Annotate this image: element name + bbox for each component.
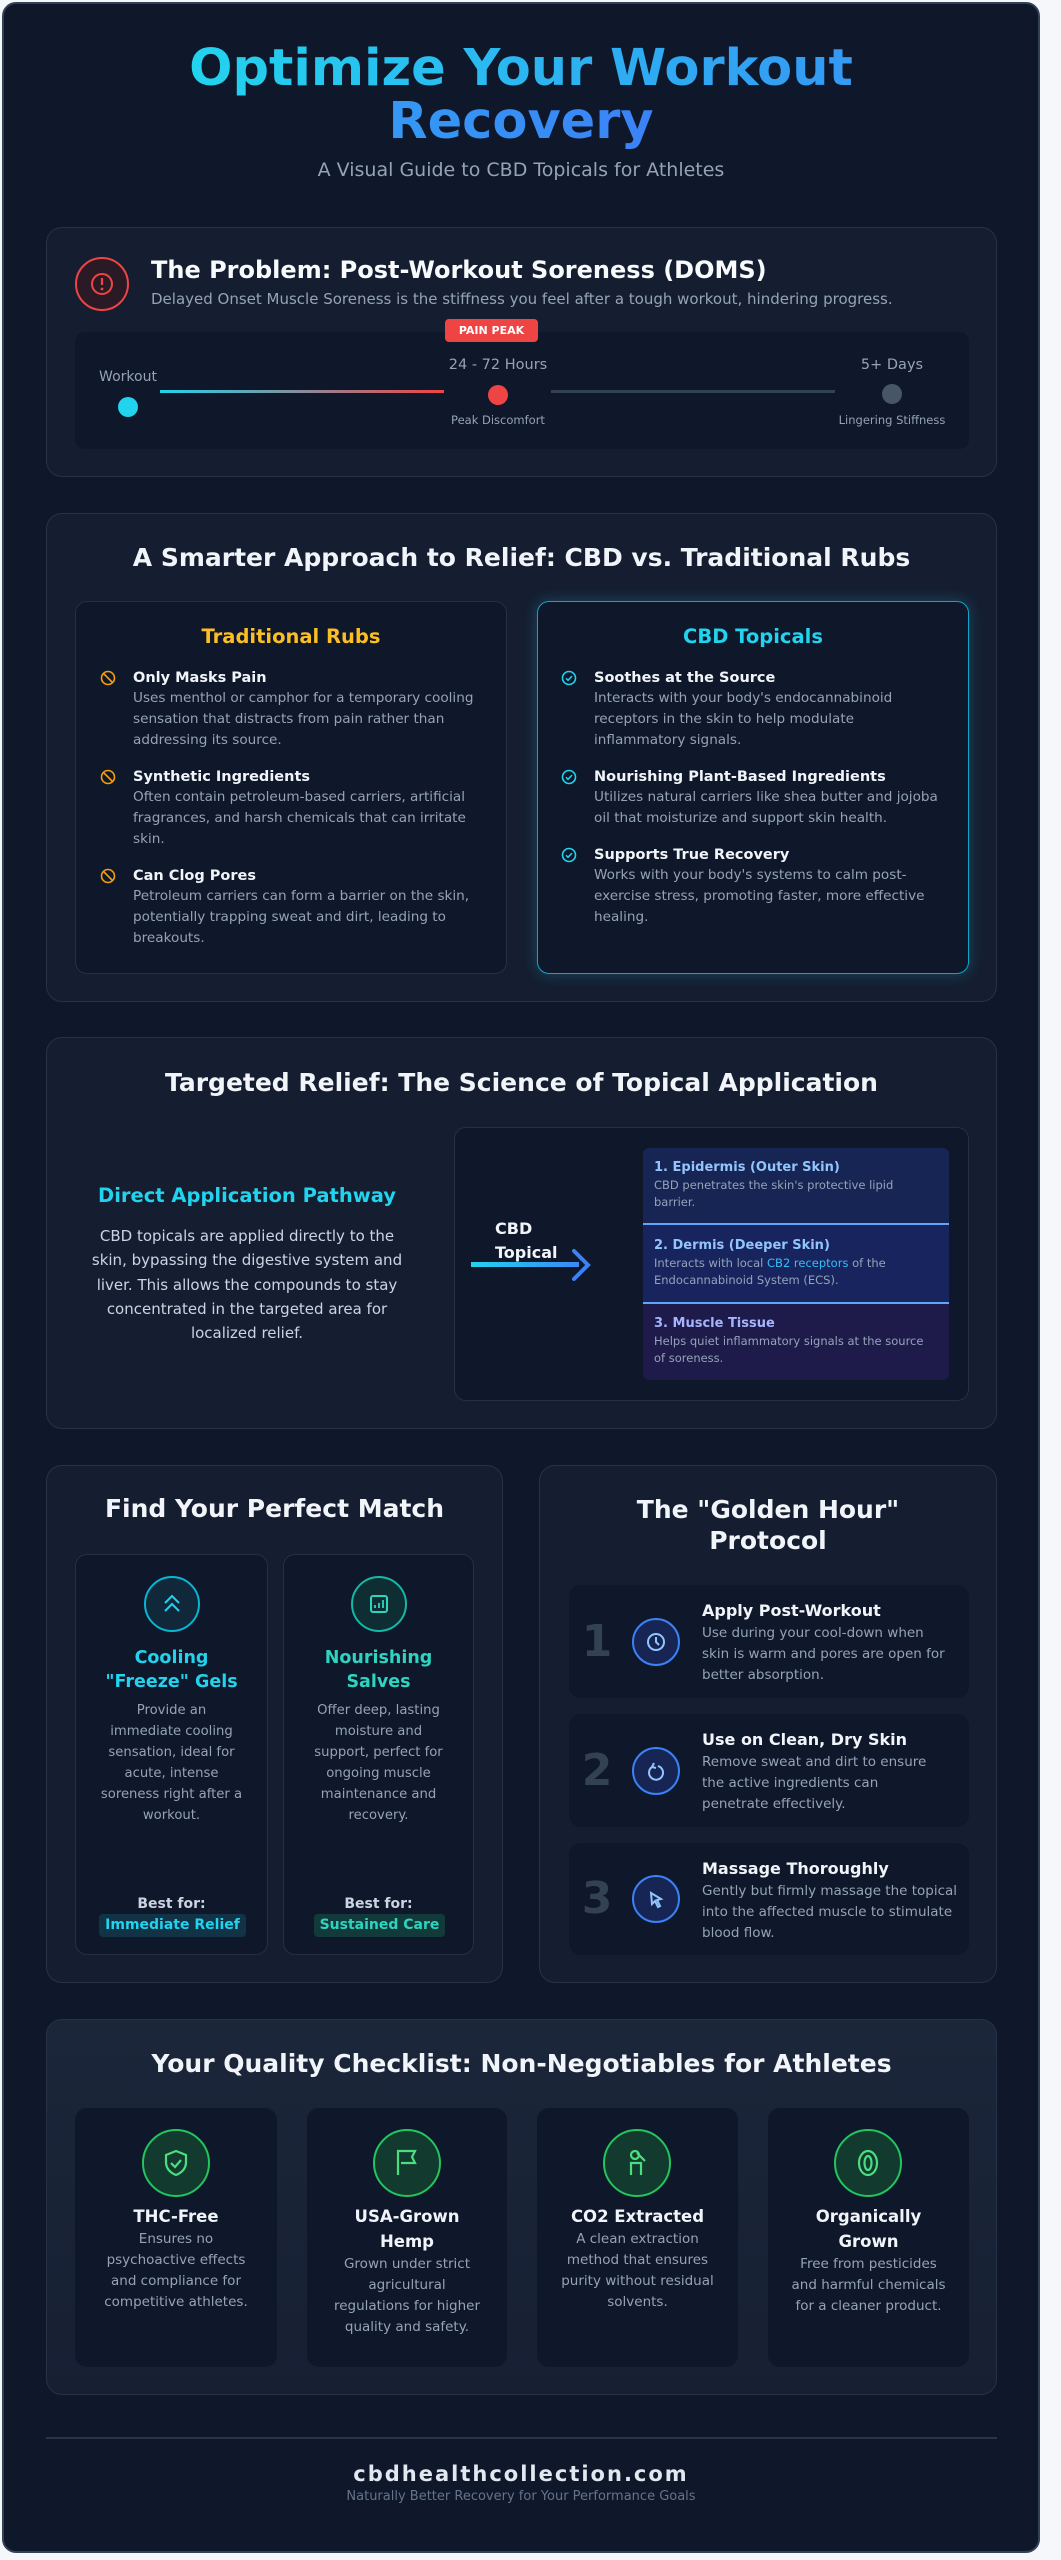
item: organically grown: Organically [816,2207,921,2226]
arrow [471,1248,591,1282]
item: only masks pain [100,670,473,748]
badge: immediate relief [99,1914,246,1937]
card: traditional rubs [75,601,507,974]
heading [636,1495,899,1555]
item: synthetic ingredients: Synthetic Ingredients [133,769,310,785]
label: CBD topical: Topical [495,1243,557,1262]
item: THC-free: THC-Free [133,2207,219,2226]
badge: sustained care: Sustained Care [320,1917,439,1933]
label: lingering stiffness: Lingering Stiffness [839,413,945,427]
item: organically grown [768,2108,969,2367]
badge: sustained care [314,1914,445,1937]
layer: epidermis [643,1148,949,1224]
item: THC-free: and compliance for [111,2273,241,2289]
card title: Traditional Rubs [202,625,380,648]
description: Offer deep, lasting [317,1703,440,1718]
card title: CBD Topicals [683,625,823,648]
gray line [551,390,835,393]
item: organically grown: Grown [838,2232,898,2251]
item: USA-grown hemp: Hemp [380,2232,434,2251]
title: Recovery [388,92,654,151]
dot: lingering [882,384,902,404]
item: only masks pain: Uses menthol or camphor for a temporary cooling sensation that distracts from pain rather than addressing its source. [133,690,473,748]
heading: Your Quality Checklist: Non-Negotiables for Athletes [151,2049,892,2078]
item: USA-grown hemp: Grown under strict agricultural regulations for higher quality and safety. [334,2256,480,2335]
card: nourishing salves [283,1554,474,1955]
item: supports true recovery: Supports True Recovery [594,847,789,863]
title: Nourishing [325,1648,432,1668]
item: can clog pores: Petroleum carriers can form a barrier on the skin, potentially trapping sweat and dirt, leading to breakouts. [133,888,469,946]
item: soothes at the source: inflammatory signals. [594,732,741,748]
layer: epidermis: CBD penetrates the skin's protective lipid barrier. [654,1178,893,1209]
icon: alert [75,257,129,311]
step 1: skin is warm and pores are open for better absorption. [702,1646,945,1683]
item: plant-based ingredients: Nourishing Plant-Based Ingredients [594,769,886,785]
item: plant-based ingredients: Utilizes natural carriers like shea butter and jojoba oil that moisturize and support skin health. [594,789,938,826]
title [189,39,853,151]
footer: cbdhealthcollection.com [353,2462,689,2486]
description: moisture and [335,1724,422,1739]
item: soothes at the source: Soothes at the Source [594,670,775,686]
description: immediate cooling [110,1724,233,1739]
dot: workout [118,397,138,417]
panel: golden hour protocol [539,1465,997,1983]
panel: find your perfect match [46,1465,503,1983]
diagram: skin layers [454,1127,969,1401]
title [105,1648,238,1692]
layer: epidermis: 1. Epidermis (Outer Skin) [654,1160,840,1175]
step 1 [569,1585,969,1698]
footer: Naturally Better Recovery for Your Performance Goals [346,2489,696,2504]
step 2: Use on Clean, Dry Skin [702,1730,907,1749]
item: only masks pain: Only Masks Pain [133,670,267,686]
item: supports true recovery [562,847,924,925]
label: CBD topical [495,1219,557,1262]
description: Delayed Onset Muscle Soreness is the stiffness you feel after a tough workout, hindering progress. [151,290,893,308]
heading: Targeted Relief: The Science of Topical Application [165,1068,878,1097]
heading: The "Golden Hour" [637,1495,899,1524]
panel: science of topical application [46,1037,997,1429]
subtitle: A Visual Guide to CBD Topicals for Athletes [318,159,724,181]
description [314,1703,443,1823]
description: recovery. [348,1808,409,1823]
title: Cooling [135,1648,208,1668]
layer: muscle tissue: Helps quiet inflammatory signals at the source of soreness. [654,1334,923,1365]
item: soothes at the source [562,670,892,748]
layer: dermis [643,1225,949,1303]
badge: immediate relief: Immediate Relief [105,1917,240,1933]
item: can clog pores: Can Clog Pores [133,868,256,884]
label: peak discomfort: Peak Discomfort [451,413,545,427]
title: Salves [346,1672,411,1692]
item: USA-grown hemp: USA-Grown [355,2207,459,2226]
label: workout: Workout [99,369,157,385]
heading: Protocol [709,1526,827,1555]
step 3: Gently but firmly massage the topical into the affected muscle to stimulate blood flow. [702,1883,957,1941]
item: THC-free: competitive athletes. [104,2294,248,2310]
item: soothes at the source: Interacts with your body's endocannabinoid receptors in the skin to help modulate [594,690,892,727]
item: organically grown: Free from pesticides and harmful chemicals for a cleaner product. [792,2256,946,2314]
description: sensation, ideal for [108,1745,235,1760]
step 2: Remove sweat and dirt to ensure [702,1754,926,1770]
description: support, perfect for [314,1745,443,1760]
card: cooling gels [75,1554,268,1955]
text block: direct application pathway: skin, bypassing the digestive system and liver. This allows the compounds to stay concentrated in the targeted area for localized relief. [92,1251,402,1342]
label: CBD topical: CBD [495,1219,532,1238]
description: maintenance and [321,1787,436,1802]
step 3: Massage Thoroughly [702,1859,889,1878]
item: CO2 extracted [537,2108,738,2367]
description: Provide an [137,1703,206,1718]
item: can clog pores [100,868,469,946]
text block: direct application pathway [92,1184,402,1342]
gradient line [160,390,444,393]
panel: the problem (DOMS) [46,227,997,477]
item: THC-free: Ensures no [139,2231,213,2247]
step 2: the active ingredients can penetrate effectively. [702,1775,878,1812]
item: CO2 extracted: CO2 Extracted [571,2207,704,2226]
label: 24-72 hours: 24 - 72 Hours [449,357,547,373]
text block: direct application pathway: CBD topicals are applied directly to the [100,1227,394,1245]
label: 5+ days: 5+ Days [861,357,923,373]
heading: The Problem: Post-Workout Soreness (DOMS) [151,256,767,284]
item: THC-free: psychoactive effects [107,2252,245,2268]
item: supports true recovery: Works with your body's systems to calm post-exercise stress, promoting faster, more effective healing. [594,867,924,925]
heading: Find Your Perfect Match [105,1494,444,1523]
icon: chevrons up [144,1576,200,1632]
title: Optimize Your Workout [189,39,853,98]
best for: Best for: [344,1896,413,1912]
description: ongoing muscle [326,1766,431,1781]
item: THC-free [75,2108,277,2367]
badge: pain peak: PAIN PEAK [459,324,524,337]
step 3: 3 [582,1873,612,1924]
layer: dermis: Interacts with local CB2 receptors of the Endocannabinoid System (ECS). [654,1256,886,1287]
description: workout. [143,1808,200,1823]
badge: pain peak [445,319,538,342]
panel: quality checklist [46,2019,997,2395]
step 2: 2 [582,1745,612,1796]
footer [346,2462,696,2504]
description: soreness right after a [101,1787,242,1802]
layer: dermis: 2. Dermis (Deeper Skin) [654,1238,830,1253]
item: synthetic ingredients: Often contain petroleum-based carriers, artificial fragrances, and harsh chemicals that can irritate skin. [133,789,466,847]
best for: Best for: [137,1896,206,1912]
step 1: Use during your cool-down when [702,1625,924,1641]
item: plant-based ingredients [562,769,938,826]
title [325,1648,432,1692]
layer: muscle tissue: 3. Muscle Tissue [654,1316,775,1331]
step 3 [569,1843,969,1955]
description: acute, intense [124,1766,218,1781]
text block: direct application pathway: Direct Application Pathway [98,1184,396,1207]
layers stack [643,1148,949,1380]
step 1: Apply Post-Workout [702,1601,881,1620]
icon: chart [351,1576,407,1632]
layer: muscle tissue [643,1304,949,1380]
title: "Freeze" Gels [105,1672,238,1692]
step 2 [569,1714,969,1827]
panel: CBD vs traditional rubs [46,513,997,1002]
item: synthetic ingredients [100,769,466,847]
dot: peak [488,385,508,405]
item: CO2 extracted: A clean extraction method that ensures purity without residual solvents. [561,2231,714,2310]
description [101,1703,242,1823]
item: USA-grown hemp [307,2108,507,2367]
timeline [75,332,969,449]
heading: A Smarter Approach to Relief: CBD vs. Traditional Rubs [133,543,910,572]
card: CBD topicals [537,601,969,974]
step 1: 1 [582,1616,612,1667]
